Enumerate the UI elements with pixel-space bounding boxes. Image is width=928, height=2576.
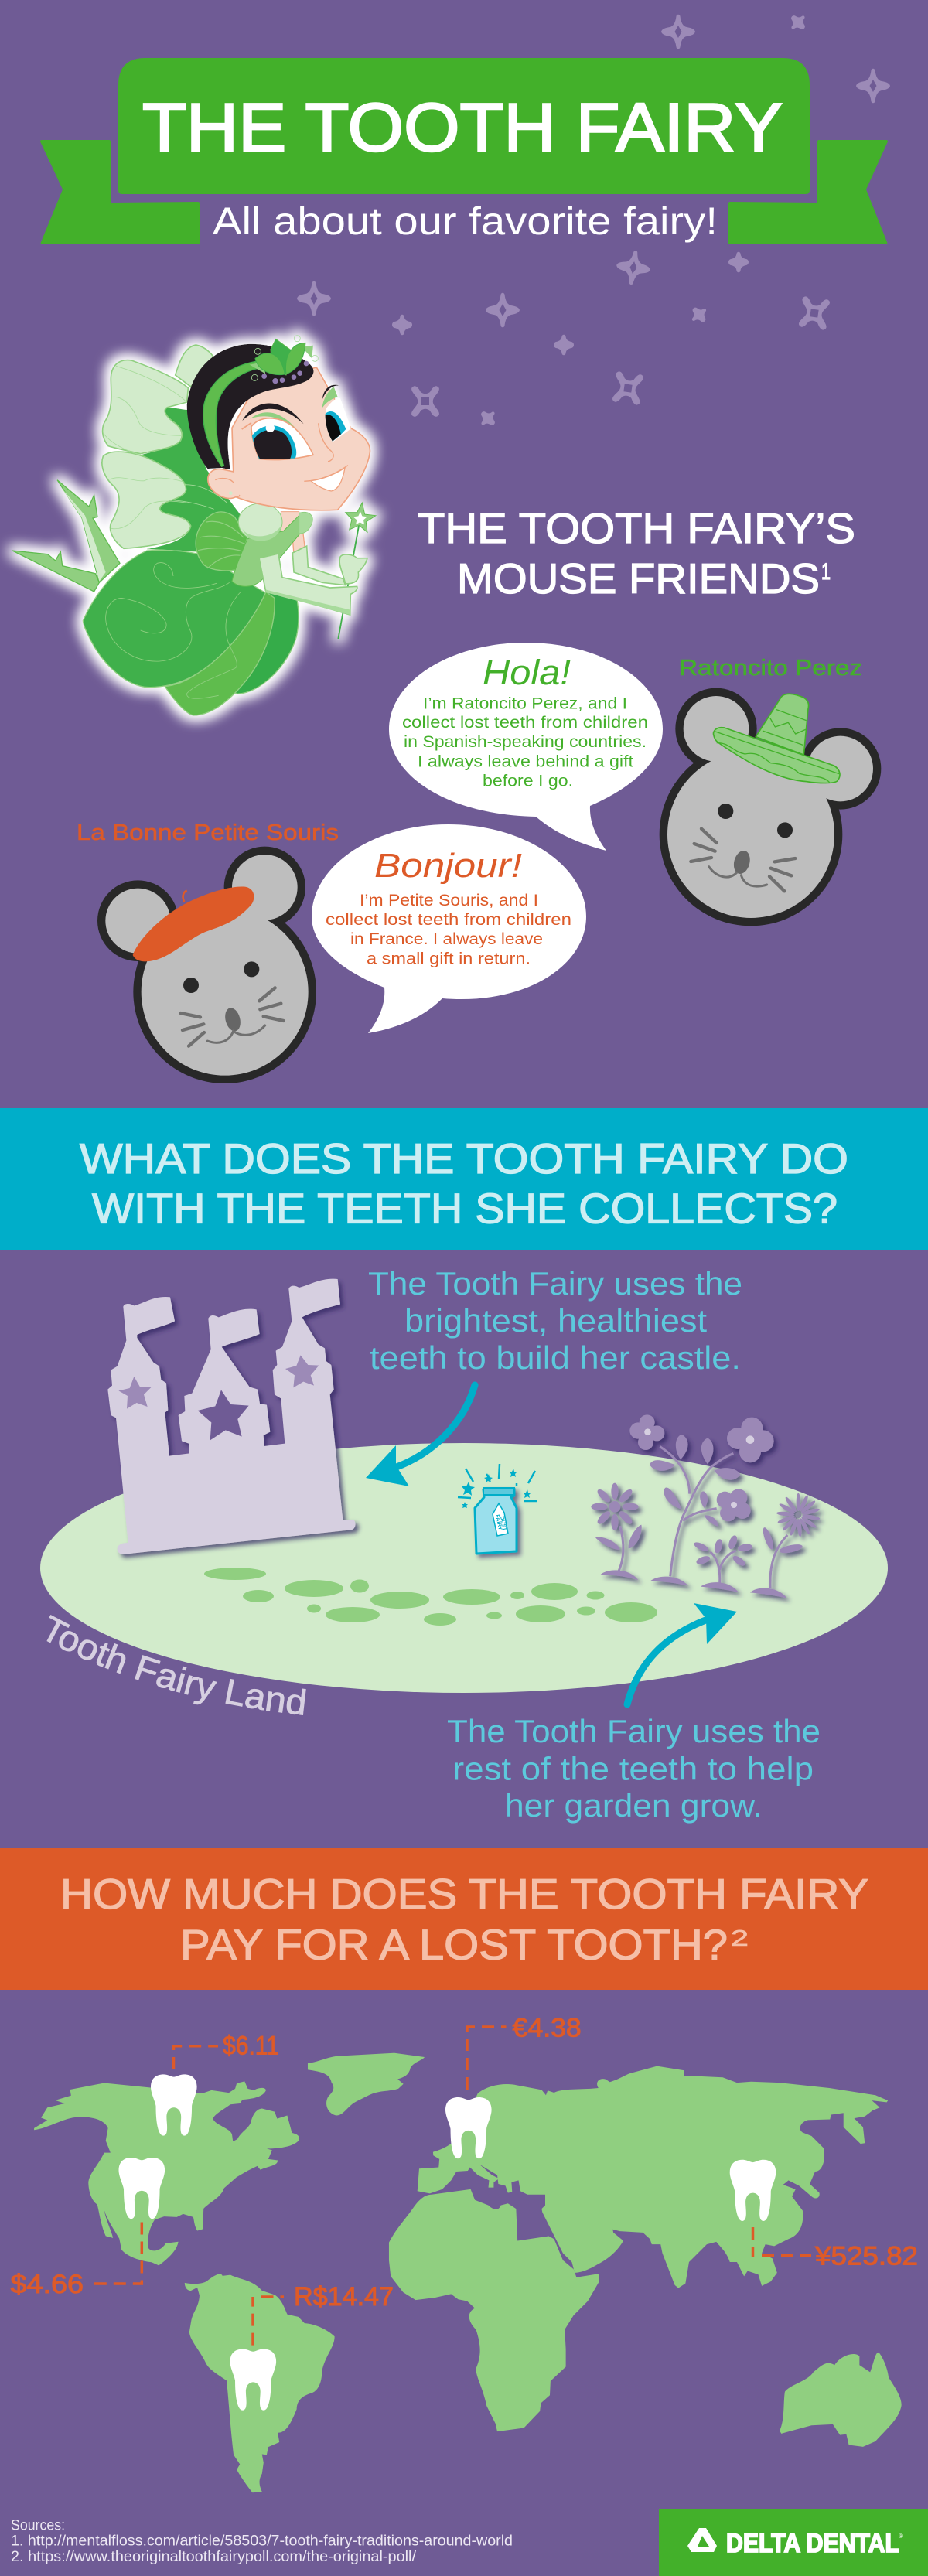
arrow: to castle (366, 1385, 475, 1486)
wand (338, 526, 359, 639)
speech bubble: Bonjour: collect lost teeth from children (326, 911, 571, 929)
arrow: to garden (627, 1603, 737, 1704)
speech bubble: Bonjour (312, 824, 586, 1033)
eye left (251, 418, 313, 460)
callout: garden text: rest of the teeth to help (452, 1751, 814, 1786)
footer logo: Delta Dental (659, 2509, 928, 2576)
hair band (203, 360, 284, 466)
legs (12, 480, 120, 592)
section banner: how much: 2 (731, 1926, 749, 1951)
section heading: mouse friends: THE TOOTH FAIRY’S (418, 504, 855, 552)
left ribbon tail (40, 140, 200, 244)
icon: fairy dust bottle: FAIRY (494, 1514, 503, 1531)
near glove (259, 554, 357, 615)
callout: castle text (368, 1265, 742, 1376)
map callout: Canada $6.11 (151, 2031, 279, 2136)
mouse: La Bonne Petite Souris (77, 821, 339, 1083)
icon: fairy dust bottle: DUST (499, 1516, 507, 1532)
Eurasia, Africa and Australia (389, 2066, 902, 2447)
tooth fairy land oval (40, 1443, 888, 1693)
section heading: mouse friends: 1 (821, 559, 831, 585)
callout: garden text: her garden grow. (505, 1787, 763, 1824)
map callout: China ¥525.82 (730, 2160, 918, 2271)
speech bubble: Hola: before I go. (483, 772, 573, 790)
sources: 2. https://www.theoriginaltoothfairypoll.com/the-original-poll/ (11, 2549, 417, 2565)
mouth (311, 468, 345, 491)
skirt overlay front (165, 592, 275, 715)
name label: La Bonne Petite Souris (77, 821, 339, 845)
callout: garden text: The Tooth Fairy uses the (447, 1713, 821, 1749)
cape behind wings (141, 408, 245, 551)
speech bubble: Hola (389, 643, 663, 851)
wings (102, 360, 191, 548)
mouse face with beret (97, 847, 316, 1083)
tiara (250, 346, 313, 374)
map callout: Brazil R$14.47 (230, 2282, 394, 2411)
sources: 1. http://mentalfloss.com/article/58503/7-tooth-fairy-traditions-around-world (11, 2533, 513, 2549)
upper arms (258, 531, 305, 555)
map callout: US $4.66: $4.66 (11, 2270, 84, 2299)
registered mark: ® (899, 2533, 903, 2540)
face (208, 367, 370, 510)
hand (339, 554, 367, 584)
subtitle: All about our favorite fairy! (213, 200, 718, 243)
ear detail (215, 479, 240, 497)
logo triangle (687, 2528, 717, 2552)
mouse face with sombrero (660, 688, 881, 926)
speech bubble: Hola: in Spanish-speaking countries. (404, 733, 647, 751)
speech bubble: Bonjour: Bonjour! (374, 847, 522, 885)
speech bubble: Hola: collect lost teeth from children (402, 714, 648, 732)
section banner: what does she do: WHAT DOES THE TOOTH FAIRY DO (80, 1134, 848, 1182)
sparkles (458, 1464, 537, 1501)
garden flowers (591, 1414, 821, 1598)
map callout: Brazil R$14.47: R$14.47 (294, 2282, 394, 2312)
green path spots (204, 1568, 657, 1626)
section banner: how much (0, 1848, 928, 1990)
shell sleeve (196, 512, 247, 571)
eye left shadow and brow (250, 412, 313, 455)
icon: fairy dust bottle (458, 1464, 537, 1554)
wand star (346, 503, 376, 532)
right daisy (750, 1493, 821, 1598)
speech bubble: Bonjour: in France. I always leave (350, 930, 543, 948)
small plant (693, 1534, 752, 1592)
section banner: what does she do (0, 1108, 928, 1250)
world map (34, 2053, 902, 2492)
label: Tooth Fairy Land: Tooth Fairy Land (46, 1615, 306, 1715)
section banner: what does she do: WITH THE TEETH SHE COLLECTS? (92, 1185, 838, 1233)
tall flower plant (629, 1414, 774, 1586)
shell lines (198, 521, 245, 568)
section heading: mouse friends (418, 504, 855, 602)
logo wordmark: DELTA DENTAL (726, 2529, 899, 2558)
far glove (292, 546, 346, 585)
sources: Sources: (11, 2518, 65, 2533)
map callout: China ¥525.82: ¥525.82 (814, 2242, 918, 2271)
Americas and Greenland (34, 2053, 425, 2492)
name label: Ratoncito Perez (679, 656, 862, 681)
speech bubble: Bonjour: I’m Petite Souris, and I (360, 892, 538, 909)
castle (107, 1279, 356, 1554)
callout: garden text (447, 1713, 821, 1824)
speech bubble: Hola: I’m Ratoncito Perez, and I (423, 694, 627, 713)
skirt swirls (106, 563, 241, 698)
neck (281, 512, 304, 531)
speech bubble: Hola: I always leave behind a gift (418, 753, 633, 770)
mouse: Ratoncito Perez (660, 656, 881, 926)
right ribbon tail (728, 140, 888, 244)
nose (319, 423, 333, 462)
map callout: Europe €4.38: €4.38 (513, 2014, 582, 2043)
skirt back (222, 582, 299, 694)
map callout: Canada $6.11: $6.11 (223, 2031, 279, 2060)
main green banner (118, 58, 810, 194)
speech bubble: Hola: Hola! (483, 653, 571, 692)
title banner (40, 58, 888, 244)
bodice (232, 513, 304, 586)
left daisy (591, 1483, 642, 1580)
eye right (322, 387, 338, 408)
decorative star field (297, 10, 890, 431)
skirt main (83, 550, 265, 688)
hair (187, 344, 313, 469)
section banner: how much: HOW MUCH DOES THE TOOTH FAIRY (60, 1870, 868, 1918)
sources (11, 2518, 513, 2565)
callout: castle text: teeth to build her castle. (370, 1339, 741, 1376)
title text: THE TOOTH FAIRY (142, 89, 783, 165)
map callout: Europe €4.38 (445, 2014, 582, 2158)
wing veins (103, 366, 227, 551)
illustration: tooth fairy (12, 336, 376, 715)
callout: castle text: brightest, healthiest (404, 1302, 707, 1339)
section banner: how much: PAY FOR A LOST TOOTH? (180, 1921, 728, 1969)
puff sleeves (238, 503, 282, 541)
flower centres (644, 1428, 801, 1518)
speech bubble: Bonjour: a small gift in return. (367, 950, 531, 968)
map callout: US $4.66 (11, 2158, 165, 2299)
section heading: mouse friends: MOUSE FRIENDS (457, 554, 820, 602)
back small wing (176, 345, 215, 387)
callout: castle text: The Tooth Fairy uses the (368, 1265, 742, 1302)
